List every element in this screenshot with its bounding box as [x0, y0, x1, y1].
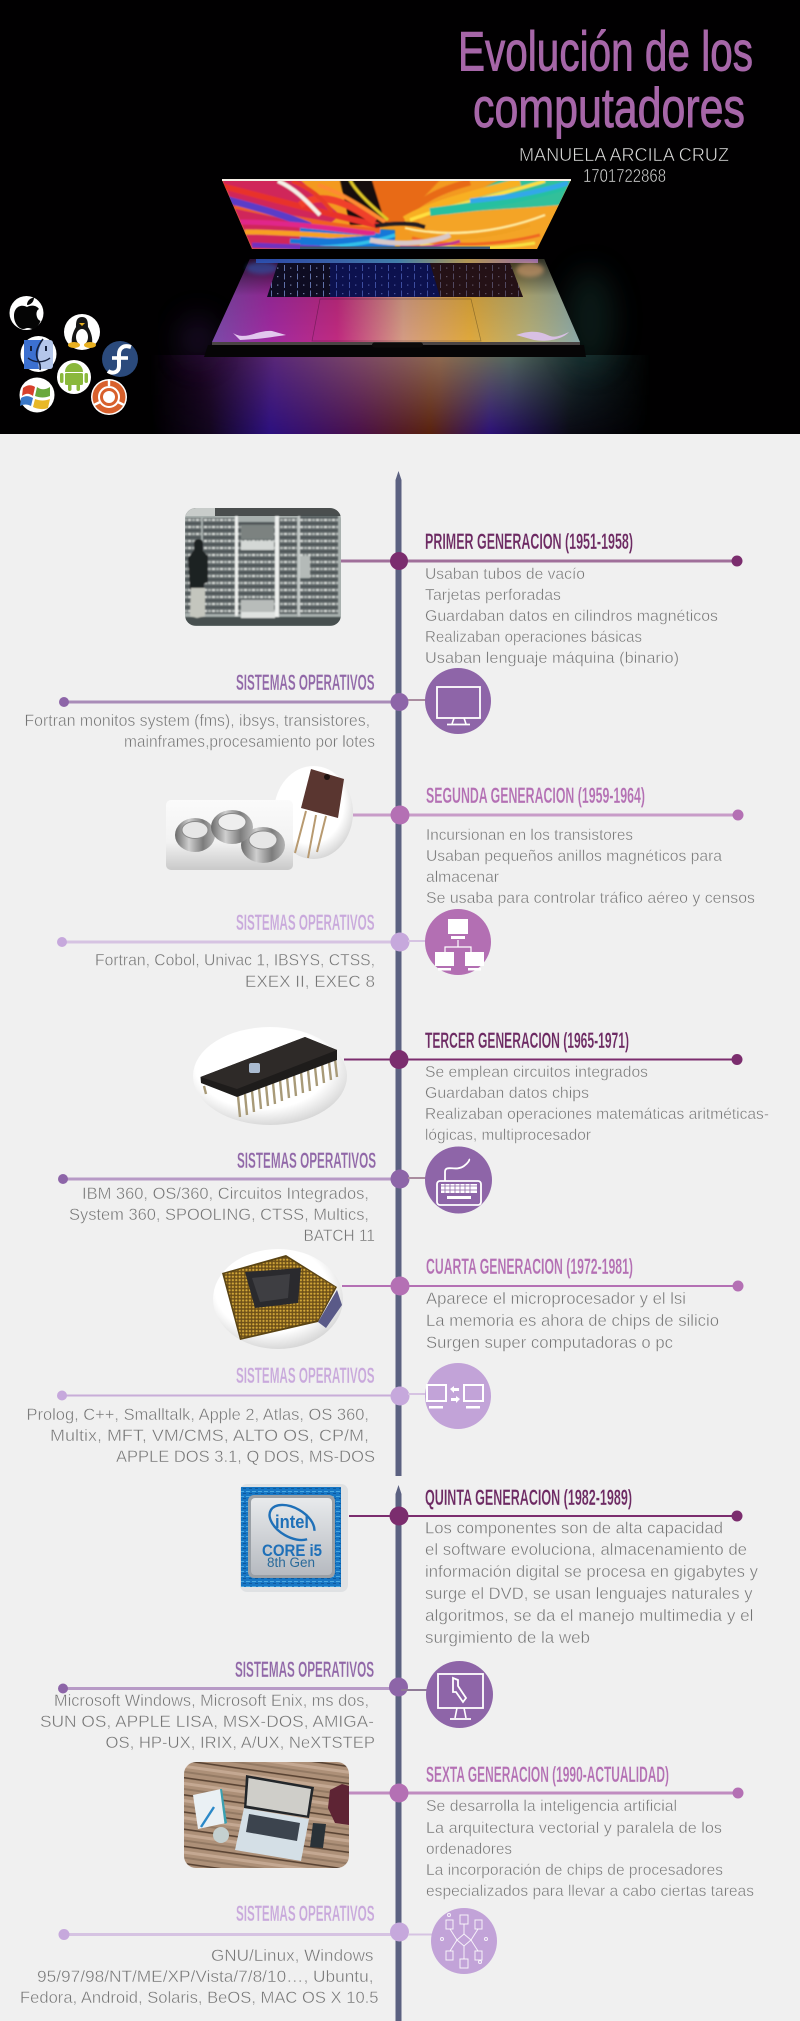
- text: systems: OS, HP-UX, IRIX, A/UX, NeXTSTEP: [106, 1734, 375, 1752]
- panel: sexta generacion: [184, 1762, 754, 1900]
- panel: primer generacion: [185, 508, 742, 667]
- text: characteristics: Usaban lenguaje máquina (binario): [425, 650, 679, 667]
- text: characteristics: Usaban pequeños anillos magnéticos para: [426, 848, 722, 865]
- photo: integrated circuit: [193, 1027, 347, 1125]
- panel: quinta generacion: QUINTA GENERACION (1982-1989): [425, 1485, 632, 1510]
- logo: linux: [64, 314, 100, 350]
- photo: magnetic rings: [166, 800, 293, 870]
- author name and id: [520, 148, 728, 182]
- text: systems: Fedora, Android, Solaris, BeOS, MAC OS X 10.5: [20, 1989, 378, 2007]
- text: characteristics: el software evoluciona, almacenamiento de: [425, 1541, 747, 1559]
- text: characteristics: La arquitectura vectorial y paralela de los: [426, 1820, 722, 1837]
- icon: connected nodes: [431, 1908, 497, 1974]
- text: characteristics: Guardaban datos en cilindros magnéticos: [425, 608, 718, 625]
- photo: intel core i5: [240, 1484, 348, 1592]
- panel: sistemas operativos 5: [40, 1657, 493, 1752]
- panel: tercer generacion: TERCER GENERACION (1965-1971): [425, 1028, 629, 1053]
- text: systems: EXEX II, EXEC 8: [245, 973, 375, 991]
- end dot: [732, 556, 742, 566]
- operating system logos: [10, 296, 138, 415]
- panel: sistemas operativos 2: SISTEMAS OPERATIVOS: [236, 910, 374, 935]
- photo: eniac: [185, 508, 341, 626]
- panel: sistemas operativos 3: SISTEMAS OPERATIVOS: [237, 1148, 376, 1173]
- text: systems: mainframes,procesamiento por lotes: [124, 733, 375, 751]
- text: characteristics: Incursionan en los transistores: [426, 827, 633, 844]
- text: systems: Fortran, Cobol, Univac 1, IBSYS, CTSS,: [95, 952, 375, 970]
- text: characteristics: surgimiento de la web: [425, 1629, 590, 1647]
- text: characteristics: especializados para llevar a cabo ciertas tareas: [426, 1883, 754, 1900]
- text: characteristics: Usaban tubos de vacío: [425, 566, 585, 583]
- text: characteristics: surge el DVD, se usan lenguajes naturales y: [425, 1585, 753, 1603]
- panel: segunda generacion: [166, 766, 755, 907]
- text: systems: [26, 1406, 375, 1466]
- text: characteristics: Tarjetas perforadas: [425, 587, 561, 604]
- logo: ubuntu: [91, 379, 127, 415]
- text: systems: SUN OS, APPLE LISA, MSX-DOS, AMIGA-: [40, 1713, 374, 1731]
- text: characteristics: ordenadores: [426, 1841, 512, 1858]
- text: characteristics: almacenar: [426, 869, 500, 886]
- text: characteristics: [426, 1798, 754, 1900]
- text: characteristics: [426, 1290, 719, 1352]
- panel: sistemas operativos 4: [26, 1363, 491, 1466]
- text: characteristics: Aparece el microprocesador y el lsi: [426, 1290, 686, 1308]
- text: systems: [95, 952, 375, 991]
- text: characteristics: información digital se procesa en gigabytes y: [425, 1563, 759, 1581]
- author name and id: MANUELA ARCILA CRUZ: [519, 145, 729, 165]
- text: systems: Fortran monitos system (fms), ibsys, transistores,: [24, 712, 370, 730]
- text: systems: Multix, MFT, VM/CMS, ALTO OS, CP/M,: [50, 1427, 369, 1445]
- panel: sistemas operativos 1: SISTEMAS OPERATIVOS: [236, 670, 374, 695]
- panel: sistemas operativos 5: SISTEMAS OPERATIVOS: [235, 1657, 374, 1682]
- text: characteristics: Se usaba para controlar tráfico aéreo y censos: [426, 890, 755, 907]
- icon: cursor on monitor: [426, 1661, 493, 1728]
- icon: keyboard: [425, 1146, 492, 1214]
- text: characteristics: [425, 1064, 769, 1144]
- text: characteristics: Se desarrolla la inteligencia artificial: [426, 1798, 677, 1815]
- icon: network: [425, 909, 491, 975]
- text: characteristics: Guardaban datos chips: [425, 1085, 589, 1102]
- panel: sistemas operativos 1: [24, 668, 491, 751]
- panel: sistemas operativos 6: [20, 1901, 497, 2007]
- photo: transistor: [274, 766, 353, 859]
- panel: sistemas operativos 2: [57, 909, 491, 991]
- figure: [188, 539, 208, 590]
- text: systems: [20, 1947, 378, 2007]
- logo: fedora: [102, 341, 138, 377]
- panel: quinta generacion: [240, 1484, 759, 1647]
- laptop screen wallpaper: [222, 181, 570, 249]
- text: characteristics: Realizaban operaciones básicas: [425, 629, 642, 646]
- photo: intel core i5: intel: [275, 1512, 309, 1532]
- connector line: [341, 560, 737, 562]
- text: characteristics: lógicas, multiprocesador: [425, 1127, 592, 1144]
- text: characteristics: La memoria es ahora de chips de silicio: [426, 1312, 719, 1330]
- text: systems: APPLE DOS 3.1, Q DOS, MS-DOS: [116, 1448, 375, 1466]
- title: [458, 20, 753, 139]
- text: systems: GNU/Linux, Windows: [211, 1947, 374, 1965]
- logo: finder: [20, 336, 56, 372]
- text: characteristics: Surgen super computadoras o pc: [426, 1334, 673, 1352]
- text: characteristics: Realizaban operaciones matemáticas aritméticas-: [425, 1106, 769, 1123]
- panel: sistemas operativos 6: SISTEMAS OPERATIVOS: [236, 1901, 374, 1926]
- keyboard: [267, 263, 523, 297]
- text: characteristics: Se emplean circuitos integrados: [425, 1064, 648, 1081]
- text: systems: [40, 1692, 375, 1752]
- text: systems: [69, 1185, 375, 1245]
- photo: microprocessor: [213, 1249, 343, 1349]
- logo: apple: [10, 296, 44, 330]
- text: systems: BATCH 11: [304, 1227, 375, 1245]
- swoosh marks: [233, 331, 286, 340]
- photo: intel core i5: 8th Gen: [267, 1555, 315, 1570]
- text: characteristics: [426, 827, 755, 907]
- node: [390, 552, 408, 570]
- panel: cuarta generacion: [213, 1249, 744, 1352]
- laptop photo: [150, 178, 650, 435]
- photo: laptop on desk: [184, 1762, 349, 1868]
- heading: PRIMER GENERACION (1951-1958): [425, 529, 633, 554]
- icon: monitor: [425, 668, 491, 734]
- text: characteristics: Los componentes son de alta capacidad: [425, 1520, 723, 1538]
- icon: data transfer: [425, 1363, 491, 1429]
- text: characteristics: La incorporación de chips de procesadores: [426, 1862, 723, 1879]
- panel: sistemas operativos 3: [58, 1146, 492, 1245]
- text: systems: Microsoft Windows, Microsoft Enix, ms dos,: [54, 1692, 369, 1710]
- logo: windows: [20, 378, 54, 412]
- text: systems: Prolog, C++, Smalltalk, Apple 2, Atlas, OS 360,: [26, 1406, 369, 1424]
- text: systems: System 360, SPOOLING, CTSS, Multics,: [69, 1206, 369, 1224]
- panel: sistemas operativos 4: SISTEMAS OPERATIVOS: [236, 1363, 374, 1388]
- text: characteristics: algoritmos, se da el manejo multimedia y el: [425, 1607, 754, 1625]
- panel: cuarta generacion: CUARTA GENERACION (1972-1981): [426, 1254, 633, 1279]
- text: systems: [24, 712, 375, 751]
- text: systems: 95/97/98/NT/ME/XP/Vista/7/8/10…, Ubuntu,: [37, 1968, 374, 1986]
- trackpad: [312, 299, 481, 341]
- text: characteristics: [425, 566, 718, 667]
- logo: android: [57, 360, 91, 394]
- text: systems: IBM 360, OS/360, Circuitos Integrados,: [82, 1185, 369, 1203]
- hero panel: [0, 0, 800, 435]
- text: characteristics: [425, 1520, 759, 1647]
- panel: tercer generacion: [193, 1027, 769, 1144]
- photo: intel core i5: CORE i5: [262, 1542, 322, 1560]
- timeline spine: [396, 471, 402, 2021]
- author name and id: 1701722868: [583, 165, 666, 186]
